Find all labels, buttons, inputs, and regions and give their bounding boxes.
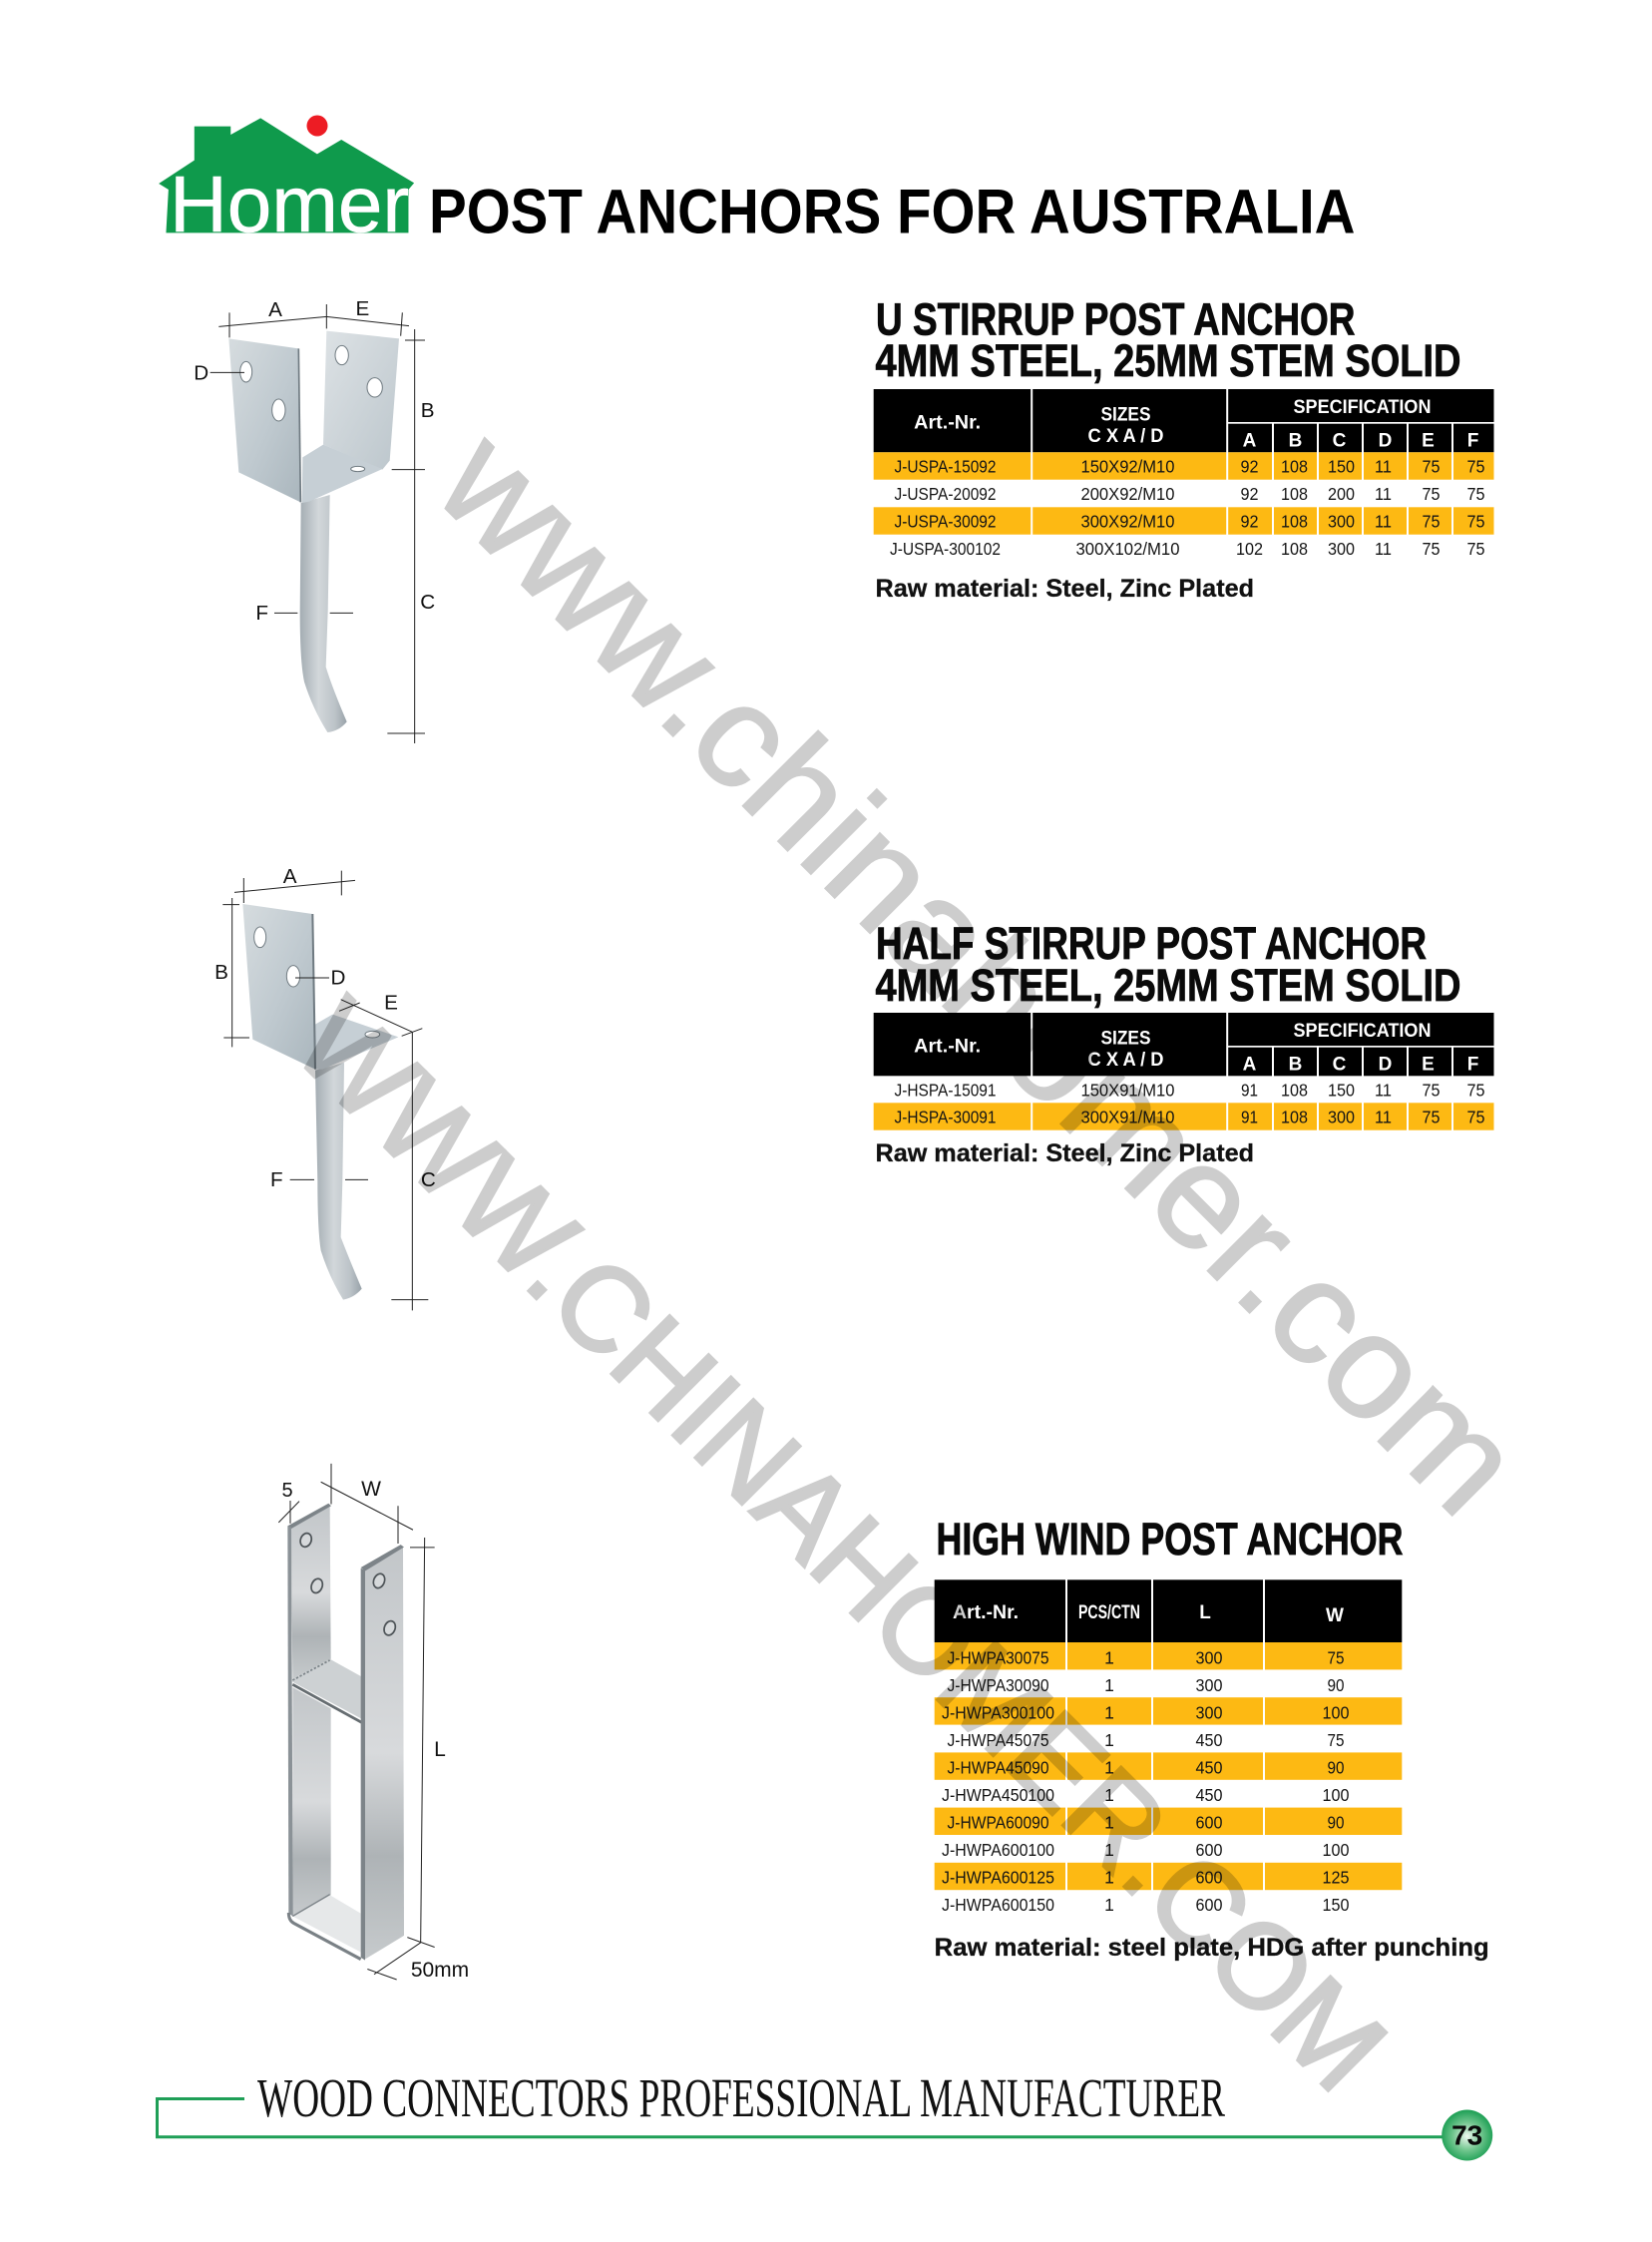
heading: half stirrup: HALF STIRRUP POST ANCHOR xyxy=(876,918,1427,969)
row J-HWPA60090: 90 xyxy=(1327,1812,1345,1832)
row J-HWPA30090: 90 xyxy=(1327,1675,1345,1695)
row J-HSPA-30091: 91 xyxy=(1241,1108,1258,1127)
row J-HWPA45090: 450 xyxy=(1195,1757,1223,1777)
half stirrup labels xyxy=(214,865,436,1191)
panel: high wind illustration xyxy=(278,1464,469,1982)
row J-HWPA30090: 300 xyxy=(1195,1675,1223,1695)
row J-USPA-300102: 300 xyxy=(1328,539,1355,559)
U stirrup dimension lines xyxy=(210,304,425,743)
row J-HWPA600150 xyxy=(942,1895,1350,1915)
row J-HWPA600150: 600 xyxy=(1195,1895,1223,1915)
half stirrup holes xyxy=(254,927,380,1038)
half stirrup labels: D xyxy=(331,966,345,989)
row J-USPA-15092: 11 xyxy=(1375,457,1392,477)
row J-HWPA60090: 1 xyxy=(1104,1812,1114,1832)
row J-HSPA-30091: 75 xyxy=(1423,1108,1441,1127)
heading: high wind: HIGH WIND POST ANCHOR xyxy=(936,1514,1403,1565)
row J-USPA-15092: 150 xyxy=(1328,457,1355,477)
row J-USPA-30092: 92 xyxy=(1241,511,1259,531)
table header labels: F xyxy=(1467,1054,1478,1076)
U stirrup labels xyxy=(194,297,435,625)
row J-HWPA600125: 600 xyxy=(1195,1868,1223,1888)
table header labels: D xyxy=(1379,1054,1392,1076)
table header labels xyxy=(914,1021,1478,1076)
table header labels: A xyxy=(1243,431,1257,451)
row J-HWPA450100: 100 xyxy=(1323,1785,1350,1805)
half stirrup labels: B xyxy=(214,961,228,984)
raw material note: half stirrup: Raw material: Steel, Zinc Plated xyxy=(876,1139,1254,1167)
logo: Homer house: Homer xyxy=(170,160,409,248)
row J-USPA-15092: 92 xyxy=(1241,457,1259,477)
table header labels: Art.-Nr. xyxy=(914,412,981,433)
half stirrup labels: E xyxy=(384,991,398,1014)
heading: half stirrup: 4MM STEEL, 25MM STEM SOLID xyxy=(876,960,1460,1011)
table header labels: F xyxy=(1467,431,1478,451)
high wind labels: L xyxy=(434,1738,446,1761)
page number badge xyxy=(1442,2109,1492,2161)
U stirrup stem xyxy=(300,495,347,732)
row J-USPA-15092 xyxy=(894,457,1484,477)
row J-USPA-30092: 108 xyxy=(1281,511,1308,531)
row J-USPA-20092: 92 xyxy=(1241,484,1259,504)
table header labels: E xyxy=(1422,431,1435,451)
table header xyxy=(935,1579,1402,1642)
row J-HWPA45090 xyxy=(948,1757,1345,1777)
footer tagline: WOOD CONNECTORS PROFESSIONAL MANUFACTURER xyxy=(257,2067,1225,2128)
row J-HSPA-15091: 91 xyxy=(1241,1080,1258,1100)
half stirrup stem xyxy=(315,1063,362,1300)
row J-USPA-30092: 75 xyxy=(1466,511,1484,531)
row J-HWPA300100: 1 xyxy=(1104,1702,1114,1722)
U stirrup labels: F xyxy=(255,602,268,625)
half stirrup plate xyxy=(242,904,315,1070)
high wind labels xyxy=(281,1478,469,1982)
row J-HSPA-30091: 300X91/M10 xyxy=(1081,1108,1175,1127)
row J-HSPA-15091: 11 xyxy=(1375,1080,1392,1100)
table header labels: Art.-Nr. xyxy=(914,1036,981,1057)
row J-USPA-15092: 75 xyxy=(1423,457,1441,477)
row J-USPA-20092: 200 xyxy=(1328,484,1355,504)
row J-HWPA30090 xyxy=(948,1675,1345,1695)
row J-HWPA45090: J-HWPA45090 xyxy=(948,1757,1049,1777)
row J-HSPA-15091 xyxy=(894,1080,1484,1100)
row J-HSPA-30091 xyxy=(894,1108,1484,1127)
row J-HWPA600150: 1 xyxy=(1104,1895,1114,1915)
table header: L xyxy=(1199,1602,1211,1623)
table header: PCS/CTN xyxy=(1078,1602,1140,1623)
row J-USPA-30092: 300X92/M10 xyxy=(1081,511,1175,531)
row J-HWPA600125 xyxy=(942,1868,1349,1888)
row J-HWPA600100: 600 xyxy=(1195,1840,1223,1860)
row J-HWPA300100: 100 xyxy=(1323,1702,1350,1722)
U stirrup right plate xyxy=(323,331,399,470)
row J-HWPA450100 xyxy=(942,1785,1350,1805)
high wind shelf and base xyxy=(288,1659,362,1960)
logo: Homer house xyxy=(159,116,414,248)
row J-HWPA45075: 450 xyxy=(1195,1730,1223,1750)
row J-HWPA600100: 100 xyxy=(1323,1840,1350,1860)
page number badge: 73 xyxy=(1451,2119,1482,2151)
row J-USPA-20092: 75 xyxy=(1423,484,1441,504)
raw material note: high wind: Raw material: steel plate, HDG after punching xyxy=(935,1934,1489,1962)
row J-HSPA-15091: 108 xyxy=(1281,1080,1308,1100)
table header labels: B xyxy=(1289,431,1302,451)
watermark line: lowercase: www.chinahomer.com xyxy=(407,399,1552,1545)
U stirrup holes xyxy=(240,345,382,472)
table header labels: D xyxy=(1379,431,1392,451)
row J-HWPA60090: 600 xyxy=(1195,1812,1223,1832)
half stirrup labels: A xyxy=(283,865,297,888)
table header labels: B xyxy=(1289,1054,1302,1076)
row J-USPA-15092: 108 xyxy=(1281,457,1308,477)
page title: POST ANCHORS FOR AUSTRALIA xyxy=(429,178,1355,247)
row J-HWPA60090 xyxy=(948,1812,1345,1832)
row J-HWPA30090: J-HWPA30090 xyxy=(948,1675,1049,1695)
row J-USPA-300102: 11 xyxy=(1375,539,1392,559)
row J-USPA-300102: 102 xyxy=(1236,539,1263,559)
watermark: website URLs xyxy=(270,399,1552,2116)
table: high wind specification xyxy=(935,1579,1402,1915)
half stirrup labels: F xyxy=(270,1168,283,1191)
row J-HWPA300100: 300 xyxy=(1195,1702,1223,1722)
table header: W xyxy=(1326,1605,1344,1626)
row J-HWPA30075: J-HWPA30075 xyxy=(948,1647,1049,1667)
table header labels: C X A / D xyxy=(1087,426,1163,447)
row J-USPA-300102: 75 xyxy=(1423,539,1441,559)
row J-HWPA450100: J-HWPA450100 xyxy=(942,1785,1054,1805)
row J-USPA-20092 xyxy=(894,484,1484,504)
row J-HSPA-30091: 75 xyxy=(1466,1108,1484,1127)
row J-HWPA30075: 75 xyxy=(1327,1647,1345,1667)
row J-HWPA600125: 1 xyxy=(1104,1868,1114,1888)
row J-USPA-30092 xyxy=(894,511,1484,531)
row J-USPA-20092: J-USPA-20092 xyxy=(894,484,996,504)
row J-HWPA600100 xyxy=(942,1840,1350,1860)
row J-HWPA30075: 1 xyxy=(1104,1647,1114,1667)
row J-HWPA600125: 125 xyxy=(1323,1868,1349,1888)
row J-HWPA600150: 150 xyxy=(1323,1895,1350,1915)
row J-HWPA45075: 1 xyxy=(1104,1730,1114,1750)
row J-HWPA45075: 75 xyxy=(1327,1730,1345,1750)
row J-USPA-20092: 75 xyxy=(1466,484,1484,504)
row J-HWPA45090: 90 xyxy=(1327,1757,1345,1777)
U stirrup base plate xyxy=(302,445,382,503)
row J-USPA-30092: J-USPA-30092 xyxy=(894,511,996,531)
table: U stirrup specification xyxy=(874,389,1494,559)
row J-USPA-30092: 11 xyxy=(1375,511,1392,531)
high wind left plates xyxy=(287,1504,331,1916)
row J-HWPA45075 xyxy=(948,1730,1345,1750)
row J-USPA-300102: 108 xyxy=(1281,539,1308,559)
U stirrup labels: B xyxy=(421,399,435,422)
high wind right plate xyxy=(361,1545,404,1961)
row J-USPA-15092: J-USPA-15092 xyxy=(894,457,996,477)
row J-HWPA30090: 1 xyxy=(1104,1675,1114,1695)
row J-HSPA-15091: 75 xyxy=(1423,1080,1441,1100)
row J-USPA-20092: 11 xyxy=(1375,484,1392,504)
row J-USPA-15092: 150X92/M10 xyxy=(1081,457,1175,477)
raw material note: U stirrup: Raw material: Steel, Zinc Plated xyxy=(876,575,1254,603)
panel: U stirrup illustration xyxy=(194,297,435,743)
row J-USPA-300102: 75 xyxy=(1466,539,1484,559)
table header labels: C X A / D xyxy=(1087,1050,1163,1071)
high wind labels: 5 xyxy=(281,1480,293,1502)
footer green bracket line xyxy=(158,2099,1446,2137)
row J-HWPA600125: J-HWPA600125 xyxy=(942,1868,1054,1888)
row J-HSPA-15091: J-HSPA-15091 xyxy=(894,1080,996,1100)
row J-HWPA600100: J-HWPA600100 xyxy=(942,1840,1054,1860)
table: half stirrup specification xyxy=(874,1013,1494,1130)
half stirrup base plate xyxy=(315,1015,398,1070)
row J-HWPA300100 xyxy=(942,1702,1350,1722)
row J-HWPA600150: J-HWPA600150 xyxy=(942,1895,1054,1915)
U stirrup left plate xyxy=(228,338,300,502)
row J-HWPA30075 xyxy=(948,1647,1345,1667)
row J-HSPA-15091: 150 xyxy=(1328,1080,1355,1100)
row J-HWPA60090: J-HWPA60090 xyxy=(948,1812,1049,1832)
row J-USPA-300102: J-USPA-300102 xyxy=(890,539,1001,559)
row J-HSPA-30091: 300 xyxy=(1328,1108,1355,1127)
half stirrup labels: C xyxy=(421,1168,436,1191)
row J-HSPA-30091: 11 xyxy=(1375,1108,1392,1127)
row J-HWPA600100: 1 xyxy=(1104,1840,1114,1860)
row J-USPA-20092: 108 xyxy=(1281,484,1308,504)
row J-HWPA300100: J-HWPA300100 xyxy=(942,1702,1054,1722)
table header labels: E xyxy=(1422,1054,1435,1076)
U stirrup labels: A xyxy=(268,298,282,321)
U stirrup labels: E xyxy=(355,297,369,320)
table header labels: SIZES xyxy=(1101,405,1151,425)
row J-HWPA450100: 450 xyxy=(1195,1785,1223,1805)
row J-USPA-30092: 75 xyxy=(1423,511,1441,531)
U stirrup labels: C xyxy=(420,591,435,614)
high wind labels: 50mm xyxy=(411,1959,469,1982)
table header labels xyxy=(914,397,1478,451)
table header labels: SIZES xyxy=(1101,1028,1151,1050)
row J-USPA-300102 xyxy=(890,539,1484,559)
row J-USPA-30092: 300 xyxy=(1328,511,1355,531)
row J-HWPA30075: 300 xyxy=(1195,1647,1223,1667)
table header labels: A xyxy=(1243,1054,1257,1076)
table header labels: C xyxy=(1333,1054,1347,1076)
table header: Art.-Nr. xyxy=(953,1602,1019,1623)
heading: half stirrup xyxy=(876,918,1460,1011)
U stirrup labels: D xyxy=(194,361,208,384)
table header labels: SPECIFICATION xyxy=(1293,397,1431,418)
watermark line: uppercase: WWW.CHINAHOMER.COM xyxy=(270,975,1412,2116)
high wind dimension lines xyxy=(278,1464,435,1980)
row J-USPA-15092: 75 xyxy=(1466,457,1484,477)
table header labels: C xyxy=(1333,431,1347,451)
half stirrup dimension lines xyxy=(222,871,428,1310)
row J-HWPA450100: 1 xyxy=(1104,1785,1114,1805)
table header labels: SPECIFICATION xyxy=(1293,1021,1431,1042)
heading: U stirrup xyxy=(876,293,1460,386)
row J-HSPA-15091: 150X91/M10 xyxy=(1081,1080,1175,1100)
row J-HWPA45090: 1 xyxy=(1104,1757,1114,1777)
high wind holes xyxy=(298,1532,397,1637)
row J-HSPA-30091: J-HSPA-30091 xyxy=(894,1108,996,1127)
row J-HWPA45075: J-HWPA45075 xyxy=(948,1730,1049,1750)
panel: half stirrup illustration xyxy=(214,865,436,1310)
row J-USPA-300102: 300X102/M10 xyxy=(1075,539,1180,559)
heading: U stirrup: U STIRRUP POST ANCHOR xyxy=(876,293,1355,345)
heading: U stirrup: 4MM STEEL, 25MM STEM SOLID xyxy=(876,335,1460,386)
row J-HSPA-30091: 108 xyxy=(1281,1108,1308,1127)
row J-USPA-20092: 200X92/M10 xyxy=(1081,484,1175,504)
high wind labels: W xyxy=(361,1478,381,1501)
row J-HSPA-15091: 75 xyxy=(1466,1080,1484,1100)
